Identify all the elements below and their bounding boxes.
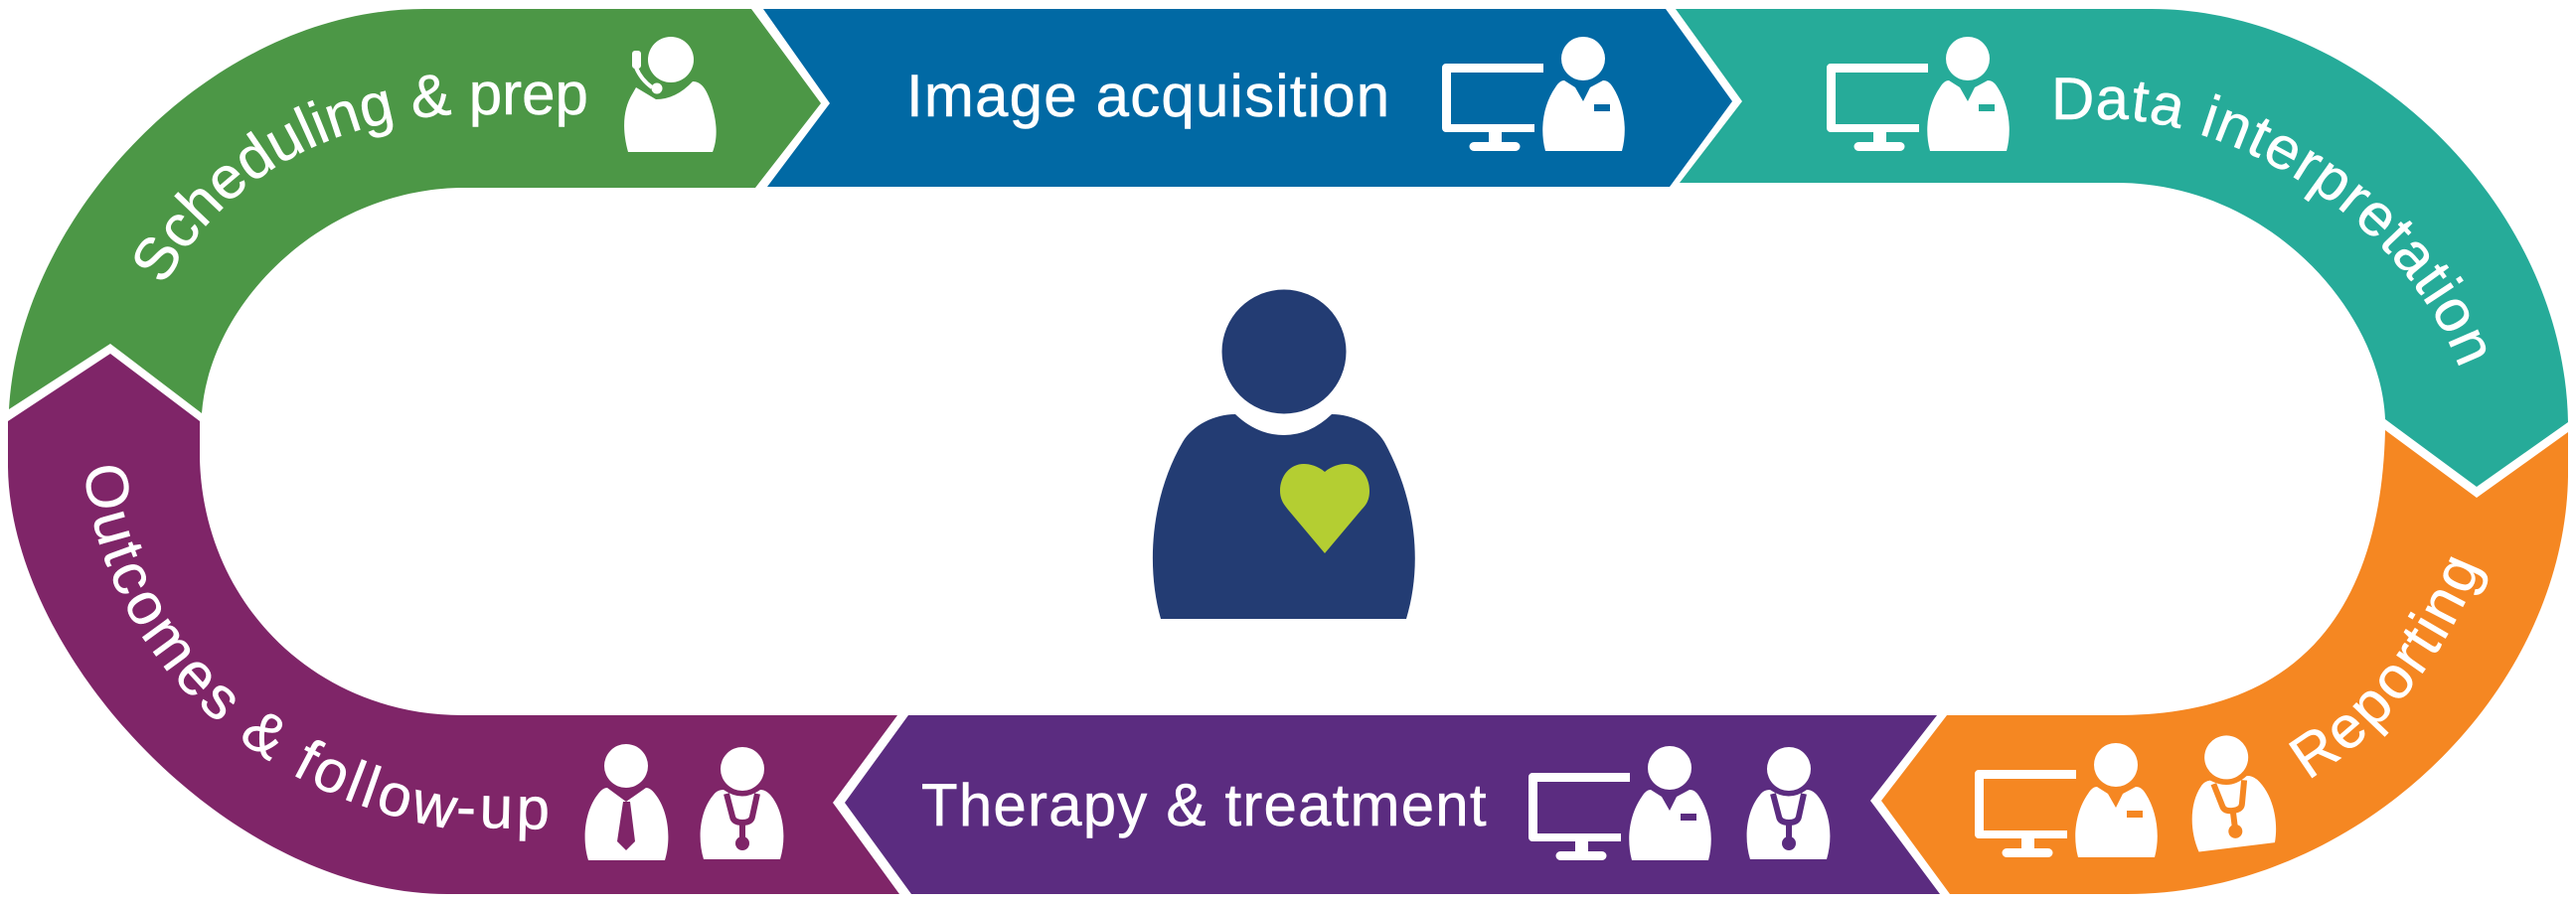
label: outcomes and follow-up: Outcomes & follow-up xyxy=(85,466,548,841)
panel: therapy and treatment xyxy=(845,715,1940,894)
band: violet arrow segment xyxy=(845,715,1940,894)
panel: scheduling and prep xyxy=(9,9,821,413)
panel: outcomes and follow-up xyxy=(8,354,899,894)
label: therapy and treatment: Therapy & treatment xyxy=(921,772,1488,838)
icon: technologist at monitor xyxy=(1442,37,1625,151)
icon: central patient figure with heart xyxy=(1153,290,1415,619)
label: scheduling and prep: Scheduling & prep xyxy=(135,75,586,280)
label: image acquisition: Image acquisition xyxy=(906,63,1390,129)
panel: reporting xyxy=(1881,430,2568,894)
icon: manager with tie xyxy=(585,744,668,860)
icon: technologist at monitor xyxy=(1827,37,2010,151)
band: blue arrow segment xyxy=(763,9,1732,187)
icon: green heart xyxy=(1280,464,1369,553)
icon: doctor with stethoscope xyxy=(2181,731,2278,852)
band: green arrow segment xyxy=(9,9,821,413)
icon: call centre operator with headset xyxy=(624,37,717,152)
label: reporting: Reporting xyxy=(2288,556,2489,779)
icon: technologist at monitor xyxy=(1975,743,2158,857)
icon: doctor with stethoscope xyxy=(701,747,783,859)
band: orange arrow segment xyxy=(1881,430,2568,894)
icon: technologist at monitor xyxy=(1529,746,1711,860)
band: plum arrow segment xyxy=(8,354,899,894)
panel: image acquisition xyxy=(763,9,1732,187)
band: teal arrow segment xyxy=(1676,9,2568,487)
icon: doctor with stethoscope xyxy=(1747,747,1830,859)
label: data interpretation: Data interpretation xyxy=(2055,77,2487,366)
panel: data interpretation xyxy=(1676,9,2568,487)
